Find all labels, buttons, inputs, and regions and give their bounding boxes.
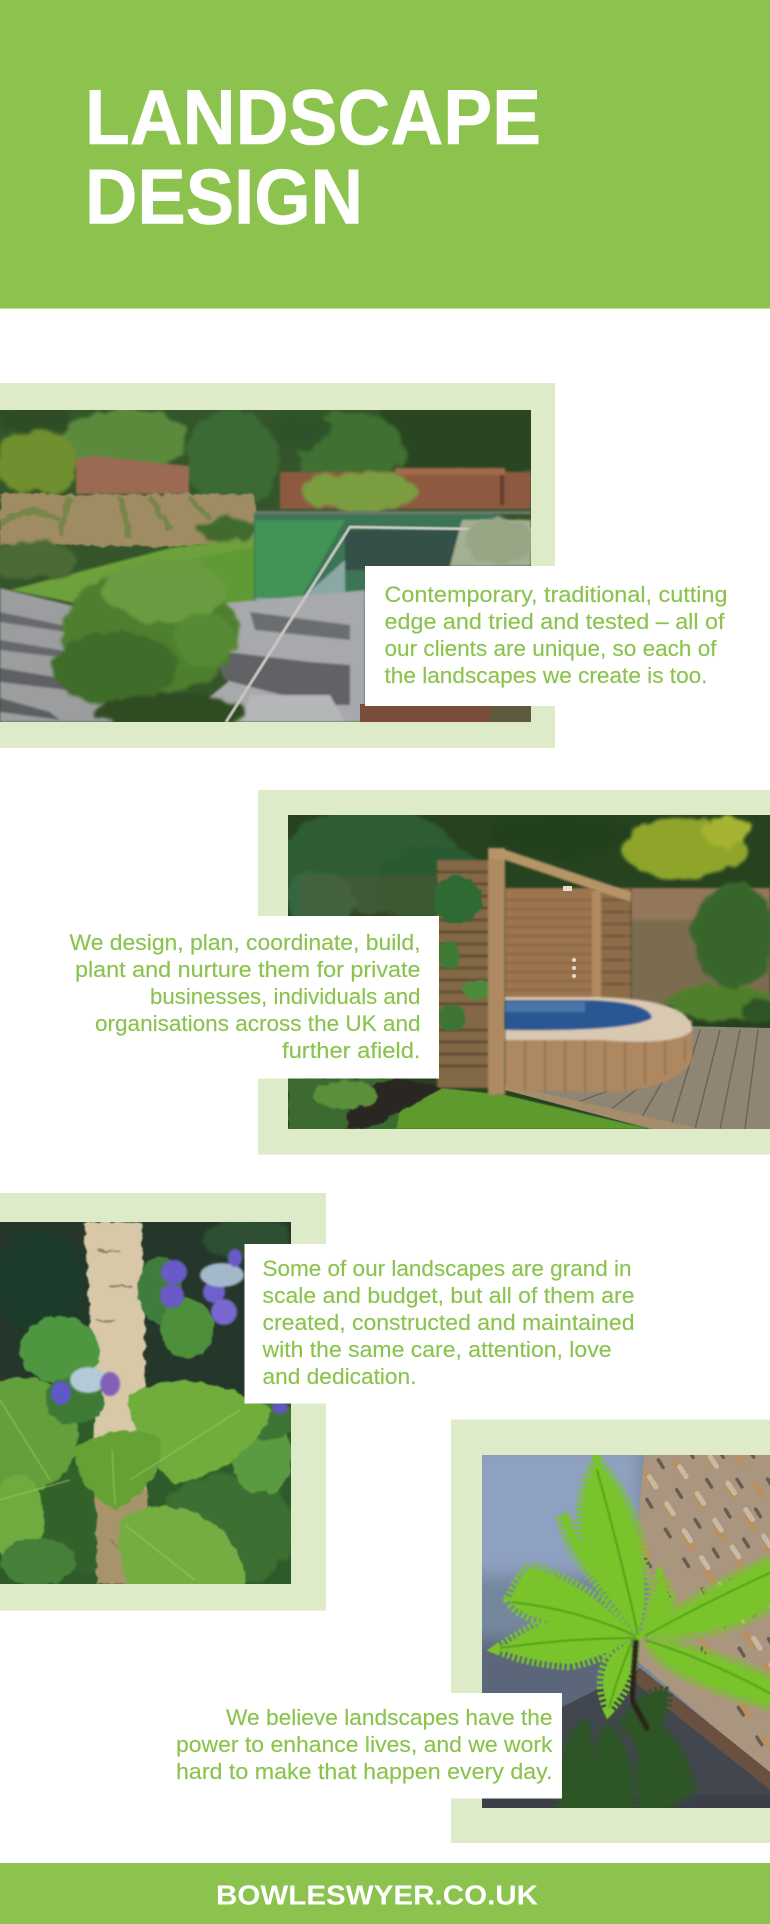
wood at bottom [360, 704, 490, 722]
panel: hot tub garden [60, 790, 770, 1154]
fence slats behind vine [300, 875, 435, 915]
caption text: organisations across the UK and [95, 1011, 420, 1036]
leaf veins [0, 1400, 240, 1580]
glass pool box [254, 511, 531, 612]
back wall and fence [631, 888, 770, 1005]
photo: wooden hot tub on decking [280, 808, 770, 1130]
caption text: scale and budget, but all of them are [262, 1283, 634, 1308]
deck [505, 1025, 770, 1129]
caption text: hard to make that happen every day. [176, 1759, 552, 1784]
title: DESIGN [85, 152, 363, 240]
panel: fern against stone wall [168, 1420, 770, 1843]
photo: garden with glass balustrade and steps [0, 405, 540, 730]
frame [258, 790, 770, 1154]
frame [0, 383, 555, 748]
caption box [365, 566, 770, 706]
caption box [244, 1244, 644, 1404]
hot tub [505, 997, 692, 1092]
vine over slats [434, 876, 492, 1032]
caption box [60, 916, 439, 1078]
paving [208, 588, 365, 722]
caption text: the landscapes we create is too. [384, 663, 708, 688]
caption text: Some of our landscapes are grand in [262, 1256, 632, 1281]
dark lower fronds [559, 1691, 692, 1812]
lawn [368, 1088, 650, 1129]
leaves [0, 1256, 295, 1590]
caption text: businesses, individuals and [150, 984, 420, 1009]
panel: contemporary garden [0, 383, 770, 748]
back panels [505, 888, 631, 1002]
frame [0, 1193, 326, 1610]
bright fronds [500, 1462, 770, 1708]
lower planting [288, 1078, 442, 1130]
hedge [0, 518, 256, 580]
glass edge shrubs [466, 516, 534, 564]
birch trunk [84, 1222, 147, 1584]
caption text: Contemporary, traditional, cutting [384, 582, 728, 607]
frame [451, 1420, 770, 1843]
stone wall [636, 1455, 770, 1772]
deck edge [505, 1084, 700, 1129]
caption text [176, 1705, 554, 1784]
caption text: power to enhance lives, and we work [176, 1732, 554, 1757]
left slatted panel [437, 860, 491, 1088]
caption text: plant and nurture them for private [75, 957, 420, 982]
ground in shadow [540, 1668, 770, 1808]
panel: hydrangea and birch [0, 1193, 644, 1610]
blue flowers [51, 1249, 288, 1414]
caption text: We believe landscapes have the [226, 1705, 552, 1730]
left fence [76, 456, 189, 494]
shower fittings [563, 886, 576, 978]
title [85, 73, 541, 240]
website address: BOWLESWYER.CO.UK [216, 1880, 538, 1910]
handrail [226, 527, 531, 722]
lawn [11, 536, 256, 604]
photo: tree fern [482, 1455, 770, 1808]
caption text: with the same care, attention, love [261, 1337, 612, 1362]
caption text [70, 930, 420, 1063]
caption text: edge and tried and tested – all of [384, 609, 725, 634]
caption text [261, 1256, 634, 1389]
caption text: We design, plan, coordinate, build, [70, 930, 420, 955]
small tree [300, 472, 416, 512]
right shrubs [667, 883, 770, 1024]
caption box [168, 1693, 562, 1798]
brick wall [0, 494, 255, 546]
caption text [384, 582, 728, 688]
photo: hydrangea leaves on birch trunk [0, 1220, 295, 1590]
caption text: our clients are unique, so each of [384, 636, 717, 661]
frond midribs [500, 1470, 770, 1708]
steps [0, 587, 115, 722]
bush in foreground [53, 558, 245, 730]
header banner [0, 0, 770, 308]
title: LANDSCAPE [85, 73, 541, 161]
caption text: further afield. [282, 1038, 420, 1063]
trees [288, 815, 754, 916]
caption text: and dedication. [262, 1364, 416, 1389]
caption text: created, constructed and maintained [262, 1310, 634, 1335]
right fence [280, 468, 531, 509]
footer banner [0, 1863, 770, 1924]
pergola post and beam [488, 848, 631, 1095]
